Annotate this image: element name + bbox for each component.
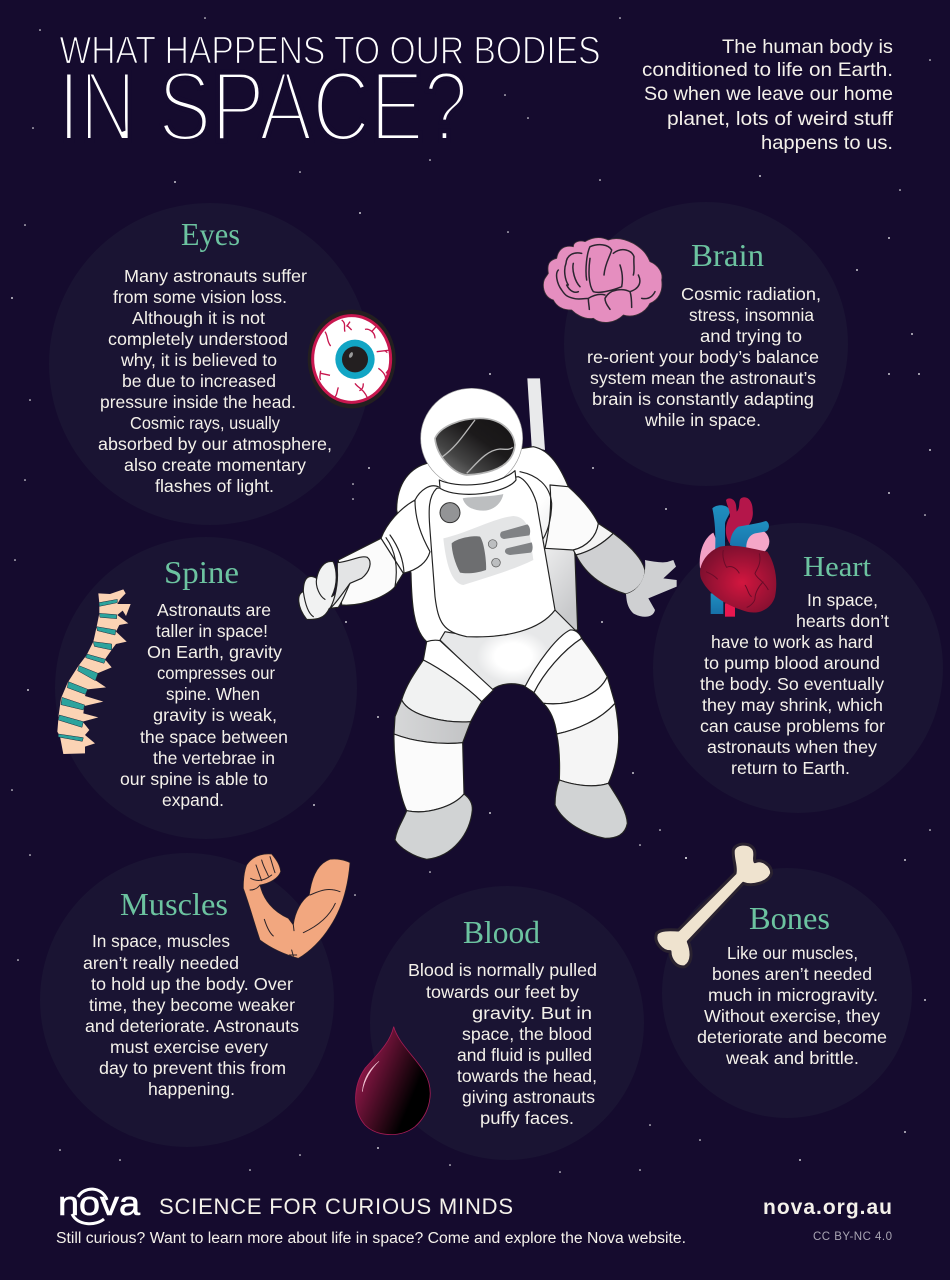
heading: heart: Heart [803, 551, 871, 583]
text: eyes: also create momentary [124, 455, 306, 475]
text: heart: In space, [807, 590, 878, 610]
text: spine: our spine is able to [120, 769, 268, 789]
intro text: conditioned to life on Earth. [642, 59, 893, 81]
title [58, 30, 600, 162]
icon: flexed arm [243, 854, 350, 958]
text: spine: expand. [162, 790, 224, 810]
text: brain: stress, insomnia [689, 305, 814, 325]
text: brain [587, 284, 821, 430]
text: muscles: aren’t really needed [83, 953, 239, 973]
panel: heart [653, 523, 943, 813]
panel: eyes [49, 203, 371, 525]
text: brain: and trying to [700, 326, 802, 346]
intro text: The human body is [722, 36, 893, 58]
icon: heart [700, 497, 776, 617]
text: heart: astronauts when they [707, 737, 877, 757]
text: eyes: Cosmic rays, usually [130, 413, 280, 433]
text: bones: much in microgravity. [708, 985, 878, 1005]
text: bones: Like our muscles, [727, 943, 858, 963]
text: eyes: be due to increased [122, 371, 276, 391]
text: spine: taller in space! [156, 621, 268, 641]
icon: blood drop [356, 1027, 430, 1135]
heading: brain: Brain [691, 237, 764, 273]
text: blood: puffy faces. [480, 1108, 574, 1128]
text: heart: to pump blood around [704, 653, 880, 673]
text: blood: gravity. But in [472, 1003, 592, 1023]
text: heart: hearts don’t [796, 611, 889, 631]
icon: bone [656, 844, 772, 967]
tagline: SCIENCE FOR CURIOUS MINDS [159, 1194, 513, 1219]
text: brain: Cosmic radiation, [681, 284, 821, 304]
text: eyes: absorbed by our atmosphere, [98, 434, 332, 454]
heading: bones: Bones [749, 900, 830, 936]
text: blood [408, 960, 597, 1128]
panel: spine [55, 537, 357, 839]
text: spine: the space between [140, 727, 288, 747]
text: brain: re-orient your body’s balance [587, 347, 819, 367]
intro text: planet, lots of weird stuff [667, 108, 894, 130]
text: blood: towards our feet by [426, 982, 579, 1002]
text: blood: and fluid is pulled [457, 1045, 592, 1065]
text: eyes [98, 266, 332, 496]
text: brain: while in space. [644, 410, 761, 430]
text: muscles: and deteriorate. Astronauts [85, 1016, 299, 1036]
text: muscles: day to prevent this from [99, 1058, 286, 1078]
text: blood: giving astronauts [462, 1087, 595, 1107]
text: bones: weak and brittle. [725, 1048, 859, 1068]
panel: blood [370, 886, 644, 1160]
heading: blood: Blood [463, 914, 540, 950]
text: spine: compresses our [157, 663, 275, 683]
title: WHAT HAPPENS TO OUR BODIES [60, 30, 600, 72]
text: blood: space, the blood [462, 1024, 592, 1044]
text: spine: gravity is weak, [153, 705, 277, 725]
text: muscles: must exercise every [110, 1037, 268, 1057]
text: eyes: completely understood [108, 329, 288, 349]
text: muscles [83, 931, 299, 1099]
title: SPACE? [158, 50, 468, 162]
text: heart [700, 590, 889, 778]
footer call to action: Still curious? Want to learn more about life in space? Come and explore the Nova website. [56, 1230, 686, 1247]
title: IN [58, 50, 136, 162]
text: muscles: happening. [148, 1079, 235, 1099]
text: brain: system mean the astronaut’s [590, 368, 816, 388]
text: muscles: to hold up the body. Over [91, 974, 293, 994]
text: bones: Without exercise, they [704, 1006, 880, 1026]
text: eyes: from some vision loss. [113, 287, 287, 307]
text: heart: return to Earth. [731, 758, 850, 778]
license: CC BY-NC 4.0 [813, 1231, 892, 1243]
text: heart: have to work as hard [711, 632, 873, 652]
text: muscles: time, they become weaker [89, 995, 295, 1015]
text: muscles: In space, muscles [92, 931, 230, 951]
text: spine: On Earth, gravity [147, 642, 282, 662]
text: heart: can cause problems for [700, 716, 885, 736]
text: spine [120, 600, 288, 810]
heading: eyes: Eyes [181, 216, 240, 252]
text: eyes: Although it is not [132, 308, 265, 328]
intro text: happens to us. [761, 132, 893, 154]
text: heart: the body. So eventually [700, 674, 884, 694]
intro text: So when we leave our home [644, 83, 893, 105]
text: eyes: why, it is believed to [120, 350, 277, 370]
text: blood: Blood is normally pulled [408, 960, 597, 980]
icon: spine [57, 589, 131, 754]
heading: spine: Spine [164, 554, 239, 590]
panel: brain [564, 202, 848, 486]
text: brain: brain is constantly adapting [592, 389, 814, 409]
intro text [642, 36, 894, 154]
icon: astronaut [299, 378, 677, 859]
text: bones: bones aren’t needed [712, 964, 872, 984]
icon: brain [543, 238, 662, 322]
text: spine: spine. When [166, 684, 260, 704]
icon: eyeball [308, 310, 396, 408]
panel: bones [662, 868, 912, 1118]
website url: nova.org.au [763, 1196, 892, 1219]
text: bones [697, 943, 887, 1068]
text: eyes: Many astronauts suffer [124, 266, 307, 286]
text: spine: Astronauts are [157, 600, 271, 620]
text: bones: deteriorate and become [697, 1027, 887, 1047]
logo: nova: nova [58, 1185, 140, 1223]
text: eyes: flashes of light. [155, 476, 274, 496]
text: eyes: pressure inside the head. [100, 392, 296, 412]
text: spine: the vertebrae in [153, 748, 275, 768]
panel: muscles [40, 853, 334, 1147]
text: heart: they may shrink, which [702, 695, 883, 715]
heading: muscles: Muscles [120, 886, 228, 922]
text: blood: towards the head, [457, 1066, 597, 1086]
